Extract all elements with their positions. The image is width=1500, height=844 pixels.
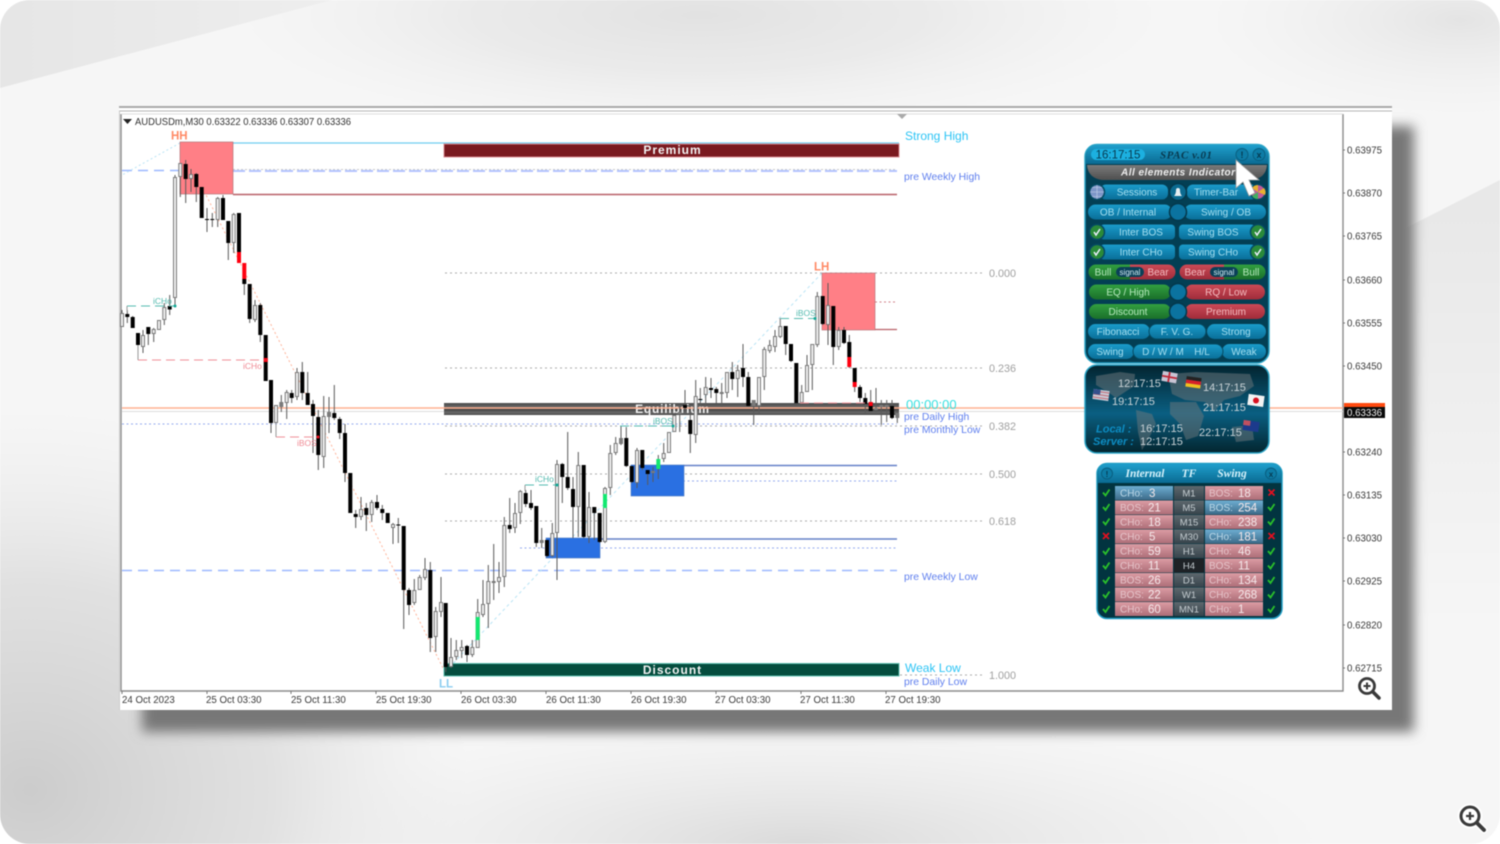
row W1: CHo: (1209, 590, 1232, 601)
labels: right-side levels: Strong High (905, 129, 968, 143)
row: signal switches: Bull (1243, 268, 1259, 278)
row M5: BOS: (1120, 503, 1144, 514)
flag: Australia (1242, 420, 1260, 432)
row M1 (1115, 486, 1263, 500)
row W1: W1 (1182, 590, 1196, 601)
clock times: 16:17:15 (1140, 423, 1183, 435)
time axis: 25 Oct 11:30 (291, 695, 346, 706)
labels: iCHo and iBOS tags: iCHo (535, 474, 554, 484)
shift marker (897, 114, 907, 119)
row: order blocks: Swing / OB (1201, 208, 1251, 218)
row: swing, D/W/M, weak: H/L (1194, 347, 1210, 358)
status cross marks (1103, 490, 1274, 539)
white candle bodies outline (122, 163, 897, 667)
fibonacci level labels: 1.000 (989, 670, 1016, 682)
row: CHo toggles: Swing CHo (1188, 248, 1238, 258)
row M15: CHo: (1120, 518, 1143, 528)
row: signal switches: signal (1120, 268, 1141, 277)
price axis: 0.62925 (1347, 576, 1382, 588)
fibonacci level labels (989, 268, 1016, 682)
row D1: 26 (1148, 575, 1161, 587)
row: discount and premium: Premium (1206, 307, 1246, 318)
row D1: BOS: (1120, 576, 1144, 586)
labels: right-side levels: 00:00:00 (906, 397, 957, 412)
row M1: BOS: (1209, 488, 1233, 500)
symbol header: AUDUSDm,M30 0.63322 0.63336 0.63307 0.63336 (135, 117, 351, 128)
zone: blue order blocks (546, 465, 684, 558)
clock times: 22:17:15 (1199, 427, 1242, 439)
row M15: CHo: (1209, 518, 1232, 528)
table header: x (1269, 470, 1274, 479)
row W1 (1115, 588, 1263, 602)
row: sessions and timer: Sessions (1117, 188, 1157, 198)
time axis: 26 Oct 19:30 (631, 695, 687, 706)
row M30: 181 (1238, 532, 1257, 544)
chart window (119, 106, 1392, 710)
labels: right-side levels: pre Daily Low (904, 677, 967, 688)
row MN1 (1115, 602, 1263, 616)
row M15: 18 (1148, 517, 1161, 529)
panel: timeframe table (1097, 464, 1282, 618)
row M30: CHo: (1120, 532, 1143, 543)
zone: premium bar (444, 143, 899, 157)
row D1: CHo: (1209, 576, 1232, 586)
row D1: D1 (1183, 576, 1195, 586)
row W1: 22 (1148, 590, 1161, 602)
time axis: 27 Oct 11:30 (800, 695, 855, 706)
table header: Internal (1124, 468, 1165, 480)
row D1: 134 (1238, 575, 1258, 587)
clock times: Server : (1093, 436, 1134, 448)
table header: TF (1182, 468, 1197, 480)
labels: iCHo and iBOS tags (153, 296, 816, 484)
row M15: M15 (1180, 518, 1198, 528)
panel header: 16:17:15 (1096, 150, 1140, 162)
row: discount and premium: Discount (1109, 307, 1148, 318)
price axis: 0.62820 (1347, 620, 1383, 632)
row M15 (1115, 515, 1263, 529)
price axis: 0.63765 (1347, 232, 1382, 242)
price axis (1343, 146, 1383, 674)
row MN1: CHo: (1120, 604, 1143, 616)
clock times: 14:17:15 (1203, 382, 1246, 394)
banner: all elements: All elements Indicator (1120, 168, 1236, 178)
flag: United States (1092, 389, 1110, 401)
candle wicks (122, 160, 897, 672)
status check marks (1103, 490, 1274, 612)
row: EQ high and RQ low: EQ / High (1106, 288, 1150, 298)
row H1: CHo: (1120, 546, 1143, 558)
clock times: 19:17:15 (1112, 396, 1155, 408)
zone: order block LH (822, 273, 875, 330)
row MN1: 1 (1238, 604, 1244, 616)
row M5 (1115, 500, 1263, 514)
row H1: H1 (1183, 546, 1195, 558)
row: signal switches: signal (1214, 268, 1235, 277)
labels: iCHo and iBOS tags: iCHo (153, 296, 172, 306)
row M30: 5 (1149, 532, 1155, 544)
row: order blocks: OB / Internal (1100, 208, 1156, 218)
price axis: 0.63240 (1347, 448, 1383, 458)
clock times: Local : (1096, 424, 1132, 436)
clock times: 21:17:15 (1203, 402, 1246, 414)
row: BOS toggles: Swing BOS (1187, 228, 1239, 238)
fibonacci level labels: 0.618 (989, 516, 1016, 528)
price levels and fibonacci grid lines (122, 143, 1343, 675)
row: signal switches: Bear (1147, 268, 1169, 278)
label: HH: HH (171, 130, 188, 142)
panel header: x (1256, 150, 1262, 160)
labels: iCHo and iBOS tags: iBOS (796, 308, 816, 318)
row: order blocks (1088, 204, 1266, 220)
row: swing, D/W/M, weak: D / W / M (1142, 347, 1184, 358)
table header (1098, 464, 1281, 483)
clock times: 12:17:15 (1118, 378, 1161, 390)
time axis: 27 Oct 19:30 (885, 695, 941, 706)
panel header (1086, 145, 1268, 164)
row: fibonacci, FVG, strong: F. V. G. (1161, 327, 1193, 338)
zone: premium bar: Premium (643, 143, 702, 157)
time axis: 25 Oct 03:30 (206, 695, 262, 706)
price axis: 0.63870 (1347, 188, 1383, 200)
row: sessions and timer (1090, 184, 1266, 200)
panel: SPAC control panel (1085, 144, 1269, 363)
black candle bodies (127, 164, 892, 667)
row M15: 238 (1238, 517, 1257, 529)
row: discount and premium (1089, 303, 1265, 320)
row M1: M1 (1182, 488, 1196, 500)
row H4: CHo: (1120, 561, 1143, 572)
row: BOS toggles (1090, 224, 1266, 240)
fibonacci level labels: 0.500 (989, 469, 1016, 481)
row H1: 46 (1238, 546, 1251, 558)
row D1 (1115, 573, 1263, 587)
row: sessions and timer: Timer-Bar (1194, 188, 1239, 198)
row W1: BOS: (1120, 590, 1144, 601)
row H4: 11 (1148, 560, 1160, 572)
row: fibonacci, FVG, strong: Strong (1221, 327, 1251, 338)
labels: iCHo and iBOS tags: iBOS (653, 416, 673, 426)
row W1: 268 (1238, 590, 1257, 602)
icon: mouse cursor (1236, 160, 1259, 196)
fibonacci level labels: 0.000 (989, 268, 1016, 280)
icon: page zoom magnifier (1458, 804, 1484, 830)
flag: Germany (1185, 376, 1202, 389)
row: CHo toggles (1090, 244, 1266, 260)
red breakout candles (239, 252, 871, 406)
row M30 (1115, 530, 1263, 544)
fibonacci level labels: 0.382 (989, 421, 1016, 433)
time axis: 26 Oct 03:30 (461, 695, 517, 706)
row MN1: MN1 (1179, 604, 1199, 616)
labels: iCHo and iBOS tags: iCHo (243, 361, 262, 371)
zone: discount bar: Discount (643, 663, 702, 677)
price axis: 0.63555 (1347, 318, 1382, 330)
chart window shadow (142, 126, 1414, 732)
row M5: M5 (1182, 503, 1196, 514)
row MN1: CHo: (1209, 604, 1232, 616)
row M5: 21 (1148, 502, 1161, 514)
row: BOS toggles: Inter BOS (1119, 228, 1163, 238)
price axis: 0.63975 (1347, 146, 1382, 156)
icon: chart zoom magnifier (1360, 678, 1379, 698)
row M1: 18 (1238, 488, 1251, 500)
price axis: 0.62715 (1347, 664, 1382, 674)
row: swing, D/W/M, weak: Swing (1096, 347, 1124, 358)
price axis: 0.63030 (1347, 534, 1383, 544)
price axis: 0.63450 (1347, 362, 1383, 372)
row: EQ high and RQ low (1089, 284, 1265, 300)
zone: discount bar (444, 663, 899, 677)
panel header: SPAC v.01 (1160, 150, 1212, 162)
structure break markers (127, 304, 870, 491)
zone: equilibrium bar: Equilibrium (635, 402, 710, 416)
panel: world clock (1085, 365, 1269, 453)
price axis: 0.63660 (1347, 276, 1383, 286)
row M5: BOS: (1209, 503, 1233, 514)
labels: iCHo and iBOS tags: iBOS (297, 438, 317, 448)
table header: Swing (1217, 468, 1247, 480)
row H1 (1115, 544, 1263, 558)
labels: right-side levels (904, 129, 981, 688)
row: swing, D/W/M, weak (1088, 344, 1266, 359)
row H1: CHo: (1209, 546, 1232, 558)
row H4: H4 (1183, 561, 1195, 572)
label: LH: LH (814, 262, 829, 274)
labels: right-side levels: pre Daily High (904, 412, 969, 423)
labels: right-side levels: pre Weekly High (904, 172, 980, 183)
time axis: 27 Oct 03:30 (715, 695, 771, 706)
table header: ! (1106, 470, 1108, 479)
white candle bodies fill (122, 164, 839, 666)
row M30: CHo: (1209, 532, 1232, 543)
green breakout candles (478, 459, 658, 640)
time axis: 25 Oct 19:30 (376, 695, 432, 706)
clock times: 12:17:15 (1140, 436, 1183, 448)
row H4: BOS: (1209, 561, 1233, 572)
labels: right-side levels: pre Weekly Low (904, 572, 978, 583)
label: LL: LL (439, 678, 453, 690)
row MN1: 60 (1148, 604, 1161, 616)
row: signal switches: Bull (1095, 268, 1111, 278)
candlesticks (122, 160, 897, 672)
row: swing, D/W/M, weak: Weak (1231, 347, 1258, 358)
labels: right-side levels: Weak Low (905, 661, 961, 675)
labels: right-side levels: pre Monthly Low (904, 425, 981, 436)
time axis: 24 Oct 2023 (122, 695, 175, 706)
zone: order block HH (180, 142, 233, 194)
row M30: M30 (1180, 532, 1198, 543)
banner: all elements (1087, 165, 1267, 180)
row H1: 59 (1148, 546, 1161, 558)
current price line (122, 407, 1343, 409)
row: fibonacci, FVG, strong (1088, 324, 1266, 339)
row: signal switches (1089, 264, 1266, 280)
clock times (1093, 378, 1246, 448)
time axis: 26 Oct 11:30 (546, 695, 601, 706)
panel header: ! (1240, 150, 1244, 160)
time axis (122, 691, 941, 706)
row M1: 3 (1149, 488, 1155, 500)
row: signal switches: Bear (1184, 268, 1206, 278)
row M1: CHo: (1120, 488, 1143, 500)
flag: Japan (1247, 394, 1265, 407)
world map (1096, 372, 1254, 450)
flag: United Kingdom (1161, 371, 1178, 383)
row: fibonacci, FVG, strong: Fibonacci (1097, 327, 1139, 338)
current price tag (1344, 403, 1385, 419)
current price tag: 0.63336 (1347, 408, 1382, 419)
zone: equilibrium bar (444, 402, 899, 416)
fibonacci level labels: 0.236 (989, 363, 1016, 375)
row H4 (1115, 558, 1263, 572)
row H4: 11 (1238, 560, 1250, 572)
row M5: 254 (1238, 502, 1258, 514)
row: CHo toggles: Inter CHo (1120, 248, 1163, 258)
row: EQ high and RQ low: RQ / Low (1205, 288, 1248, 298)
price axis: 0.63135 (1347, 490, 1382, 502)
